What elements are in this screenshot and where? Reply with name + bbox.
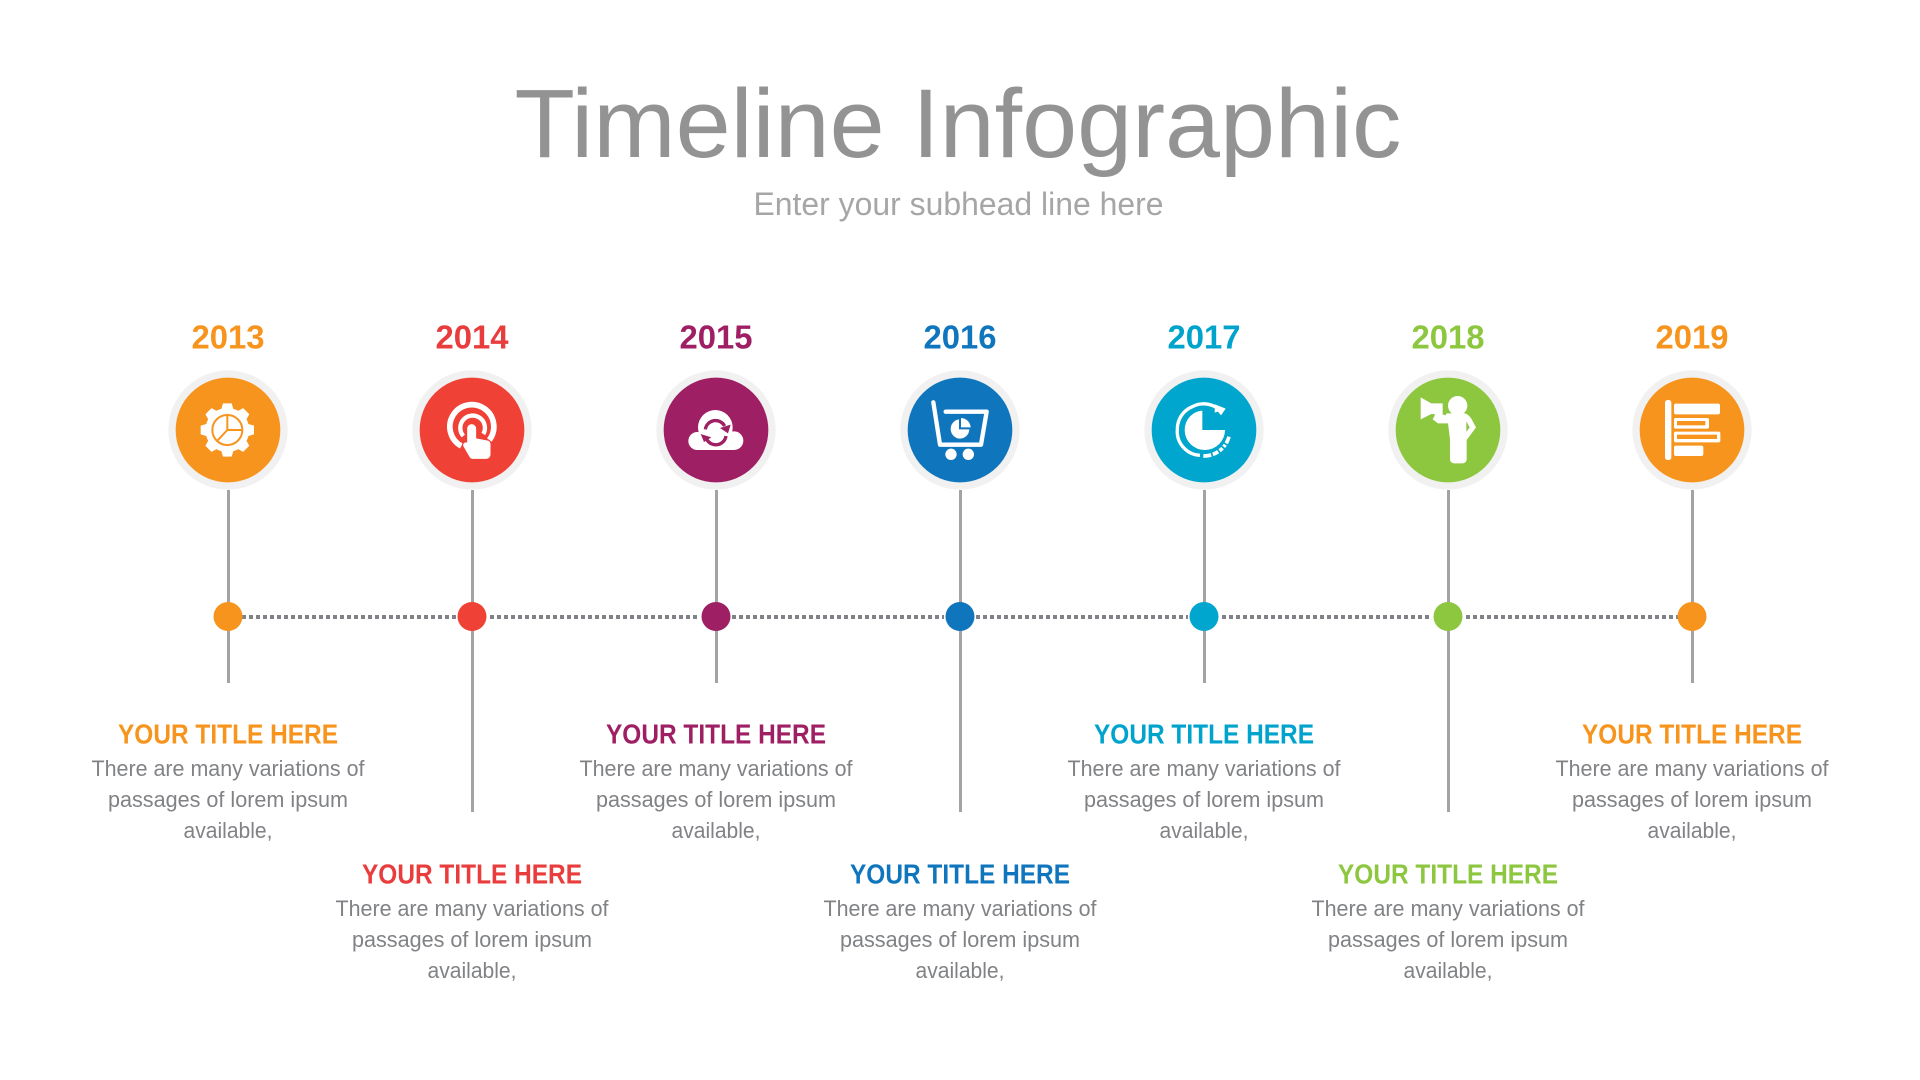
icon: horizontal bar chart: [1632, 370, 1752, 490]
text block 2018: YOUR TITLE HERE: [1338, 858, 1558, 890]
text block 2015: There are many variations of: [580, 756, 853, 781]
title: Timeline Infographic: [514, 69, 1402, 178]
year 2014: 2014: [436, 320, 509, 356]
icon: shopping cart: [900, 370, 1020, 490]
text block 2014: There are many variations of: [336, 896, 609, 921]
milestone 2013: [92, 320, 365, 843]
text block 2014: available,: [428, 958, 516, 983]
text block 2014: [336, 858, 609, 983]
text block 2016: YOUR TITLE HERE: [850, 858, 1070, 890]
milestone 2015: [580, 320, 853, 843]
milestone 2019: [1556, 320, 1829, 843]
text block 2019: passages of lorem ipsum: [1572, 787, 1812, 812]
dotted timeline: [242, 615, 1678, 619]
text block 2013: YOUR TITLE HERE: [118, 718, 338, 750]
dot 2015: [702, 602, 730, 631]
dot 2013: [214, 602, 242, 631]
text block 2017: passages of lorem ipsum: [1084, 787, 1324, 812]
text block 2018: available,: [1404, 958, 1492, 983]
text block 2017: [1068, 718, 1341, 843]
text block 2014: YOUR TITLE HERE: [362, 858, 582, 890]
text block 2015: available,: [672, 818, 760, 843]
text block 2018: passages of lorem ipsum: [1328, 927, 1568, 952]
dot 2019: [1678, 602, 1706, 631]
icon: cloud sync: [656, 370, 776, 490]
year 2018: 2018: [1412, 320, 1484, 356]
icon: circular pie arrow: [1144, 370, 1264, 490]
connector lines: [228, 490, 1692, 812]
milestone 2017: [1068, 320, 1341, 843]
year 2017: 2017: [1168, 320, 1240, 356]
text block 2019: YOUR TITLE HERE: [1582, 718, 1802, 750]
subtitle: Enter your subhead line here: [754, 186, 1164, 222]
text block 2017: YOUR TITLE HERE: [1094, 718, 1314, 750]
text block 2016: passages of lorem ipsum: [840, 927, 1080, 952]
milestone 2014: [336, 320, 609, 983]
milestone 2016: [824, 320, 1097, 983]
text block 2015: YOUR TITLE HERE: [606, 718, 826, 750]
text block 2013: There are many variations of: [92, 756, 365, 781]
text block 2019: There are many variations of: [1556, 756, 1829, 781]
milestone 2018: [1312, 320, 1585, 983]
dot 2016: [946, 602, 974, 631]
dot 2018: [1434, 602, 1462, 631]
text block 2013: passages of lorem ipsum: [108, 787, 348, 812]
year 2013: 2013: [192, 320, 264, 356]
text block 2017: There are many variations of: [1068, 756, 1341, 781]
icon: gear with pie chart: [168, 370, 288, 490]
dot 2017: [1190, 602, 1218, 631]
text block 2019: available,: [1648, 818, 1736, 843]
text block 2016: There are many variations of: [824, 896, 1097, 921]
text block 2013: [92, 718, 365, 843]
text block 2013: available,: [184, 818, 272, 843]
text block 2016: [824, 858, 1097, 983]
text block 2018: There are many variations of: [1312, 896, 1585, 921]
year 2016: 2016: [924, 320, 996, 356]
text block 2017: available,: [1160, 818, 1248, 843]
year 2015: 2015: [680, 320, 752, 356]
dot 2014: [458, 602, 486, 631]
icon: person with megaphone: [1388, 370, 1508, 490]
icon: touch finger: [412, 370, 532, 490]
text block 2019: [1556, 718, 1829, 843]
text block 2015: passages of lorem ipsum: [596, 787, 836, 812]
text block 2014: passages of lorem ipsum: [352, 927, 592, 952]
text block 2015: [580, 718, 853, 843]
year 2019: 2019: [1656, 320, 1728, 356]
text block 2018: [1312, 858, 1585, 983]
text block 2016: available,: [916, 958, 1004, 983]
